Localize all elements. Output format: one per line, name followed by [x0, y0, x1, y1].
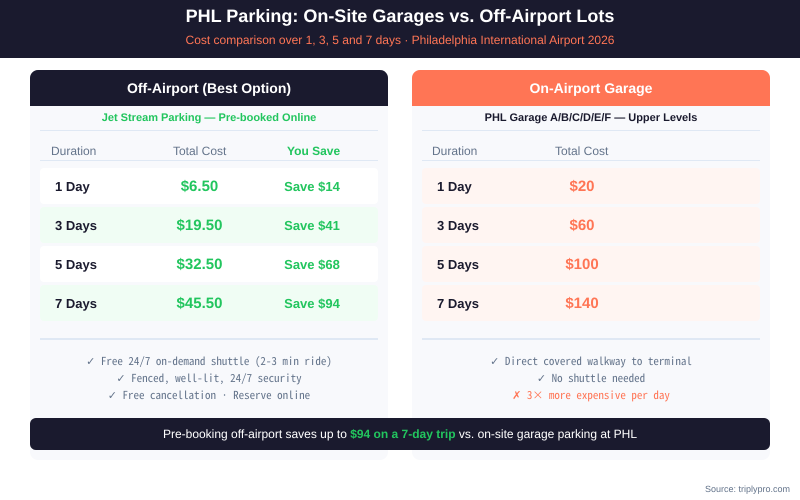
feature notes: ✓ Fenced, well-lit, 24/7 security: [116, 370, 302, 386]
feature notes: ✗ 3× more expensive per day: [512, 387, 670, 403]
title: PHL Parking: On-Site Garages vs. Off-Airport Lots: [186, 6, 614, 26]
panel heading: off-airport: Off-Airport (Best Option): [127, 80, 291, 96]
row: 1 day: 1 Day: [437, 179, 472, 194]
row: 7 days: Save $94: [284, 296, 340, 311]
row: 7 days: [422, 285, 760, 321]
row: 5 days: [40, 246, 378, 282]
callout banner: Pre-booking off-airport saves up to $94 on a 7-day trip vs. on-site garage parking at PHL: [163, 427, 637, 441]
row: 5 days: [422, 246, 760, 282]
row: 3 days: $60: [569, 217, 595, 234]
panel heading: on-airport: [412, 70, 770, 106]
feature notes: ✓ Direct covered walkway to terminal: [490, 353, 692, 369]
row: 5 days: Save $68: [284, 257, 340, 272]
header band: [0, 0, 800, 58]
row: 1 day: [40, 168, 378, 204]
subtitle: Cost comparison over 1, 3, 5 and 7 days · Philadelphia International Airport 2026: [186, 33, 614, 47]
row: 5 days: $100: [565, 256, 599, 273]
column header: duration: Duration: [432, 144, 477, 158]
column header: total cost: Total Cost: [555, 144, 608, 158]
panel: on-airport: [412, 70, 770, 460]
row: 3 days: Save $41: [284, 218, 340, 233]
feature notes: ✓ Free 24/7 on-demand shuttle (2-3 min ride): [86, 353, 332, 369]
row: 3 days: $19.50: [177, 217, 222, 234]
row: 1 day: Save $14: [284, 179, 340, 194]
row: 7 days: [40, 285, 378, 321]
row: 3 days: [40, 207, 378, 243]
source note: Source: triplypro.com: [705, 484, 790, 494]
row: 3 days: 3 Days: [437, 218, 479, 233]
row: 7 days: $140: [565, 295, 599, 312]
row: 5 days: 5 Days: [55, 257, 97, 272]
panel: off-airport: [30, 70, 388, 460]
column header: you save: You Save: [287, 144, 340, 158]
row: 3 days: 3 Days: [55, 218, 97, 233]
provider name: PHL garage: PHL Garage A/B/C/D/E/F — Upper Levels: [485, 112, 697, 124]
feature notes: [490, 353, 692, 403]
panel heading: off-airport: [30, 70, 388, 106]
callout banner: [30, 418, 770, 450]
row: 1 day: 1 Day: [55, 179, 90, 194]
row: 7 days: $45.50: [177, 295, 222, 312]
provider name: Jet Stream: Jet Stream Parking — Pre-booked Online: [102, 112, 316, 124]
column header: duration: Duration: [51, 144, 96, 158]
row: 1 day: [422, 168, 760, 204]
row: 7 days: 7 Days: [437, 296, 479, 311]
row: 1 day: $20: [569, 178, 595, 195]
row: 3 days: [422, 207, 760, 243]
row: 7 days: 7 Days: [55, 296, 97, 311]
feature notes: ✓ No shuttle needed: [537, 370, 645, 386]
row: 5 days: $32.50: [177, 256, 222, 273]
column header: total cost: Total Cost: [173, 144, 226, 158]
feature notes: ✓ Free cancellation · Reserve online: [108, 387, 310, 403]
row: 1 day: $6.50: [181, 178, 218, 195]
feature notes: [86, 353, 332, 403]
row: 5 days: 5 Days: [437, 257, 479, 272]
panel heading: on-airport: On-Airport Garage: [530, 80, 652, 96]
